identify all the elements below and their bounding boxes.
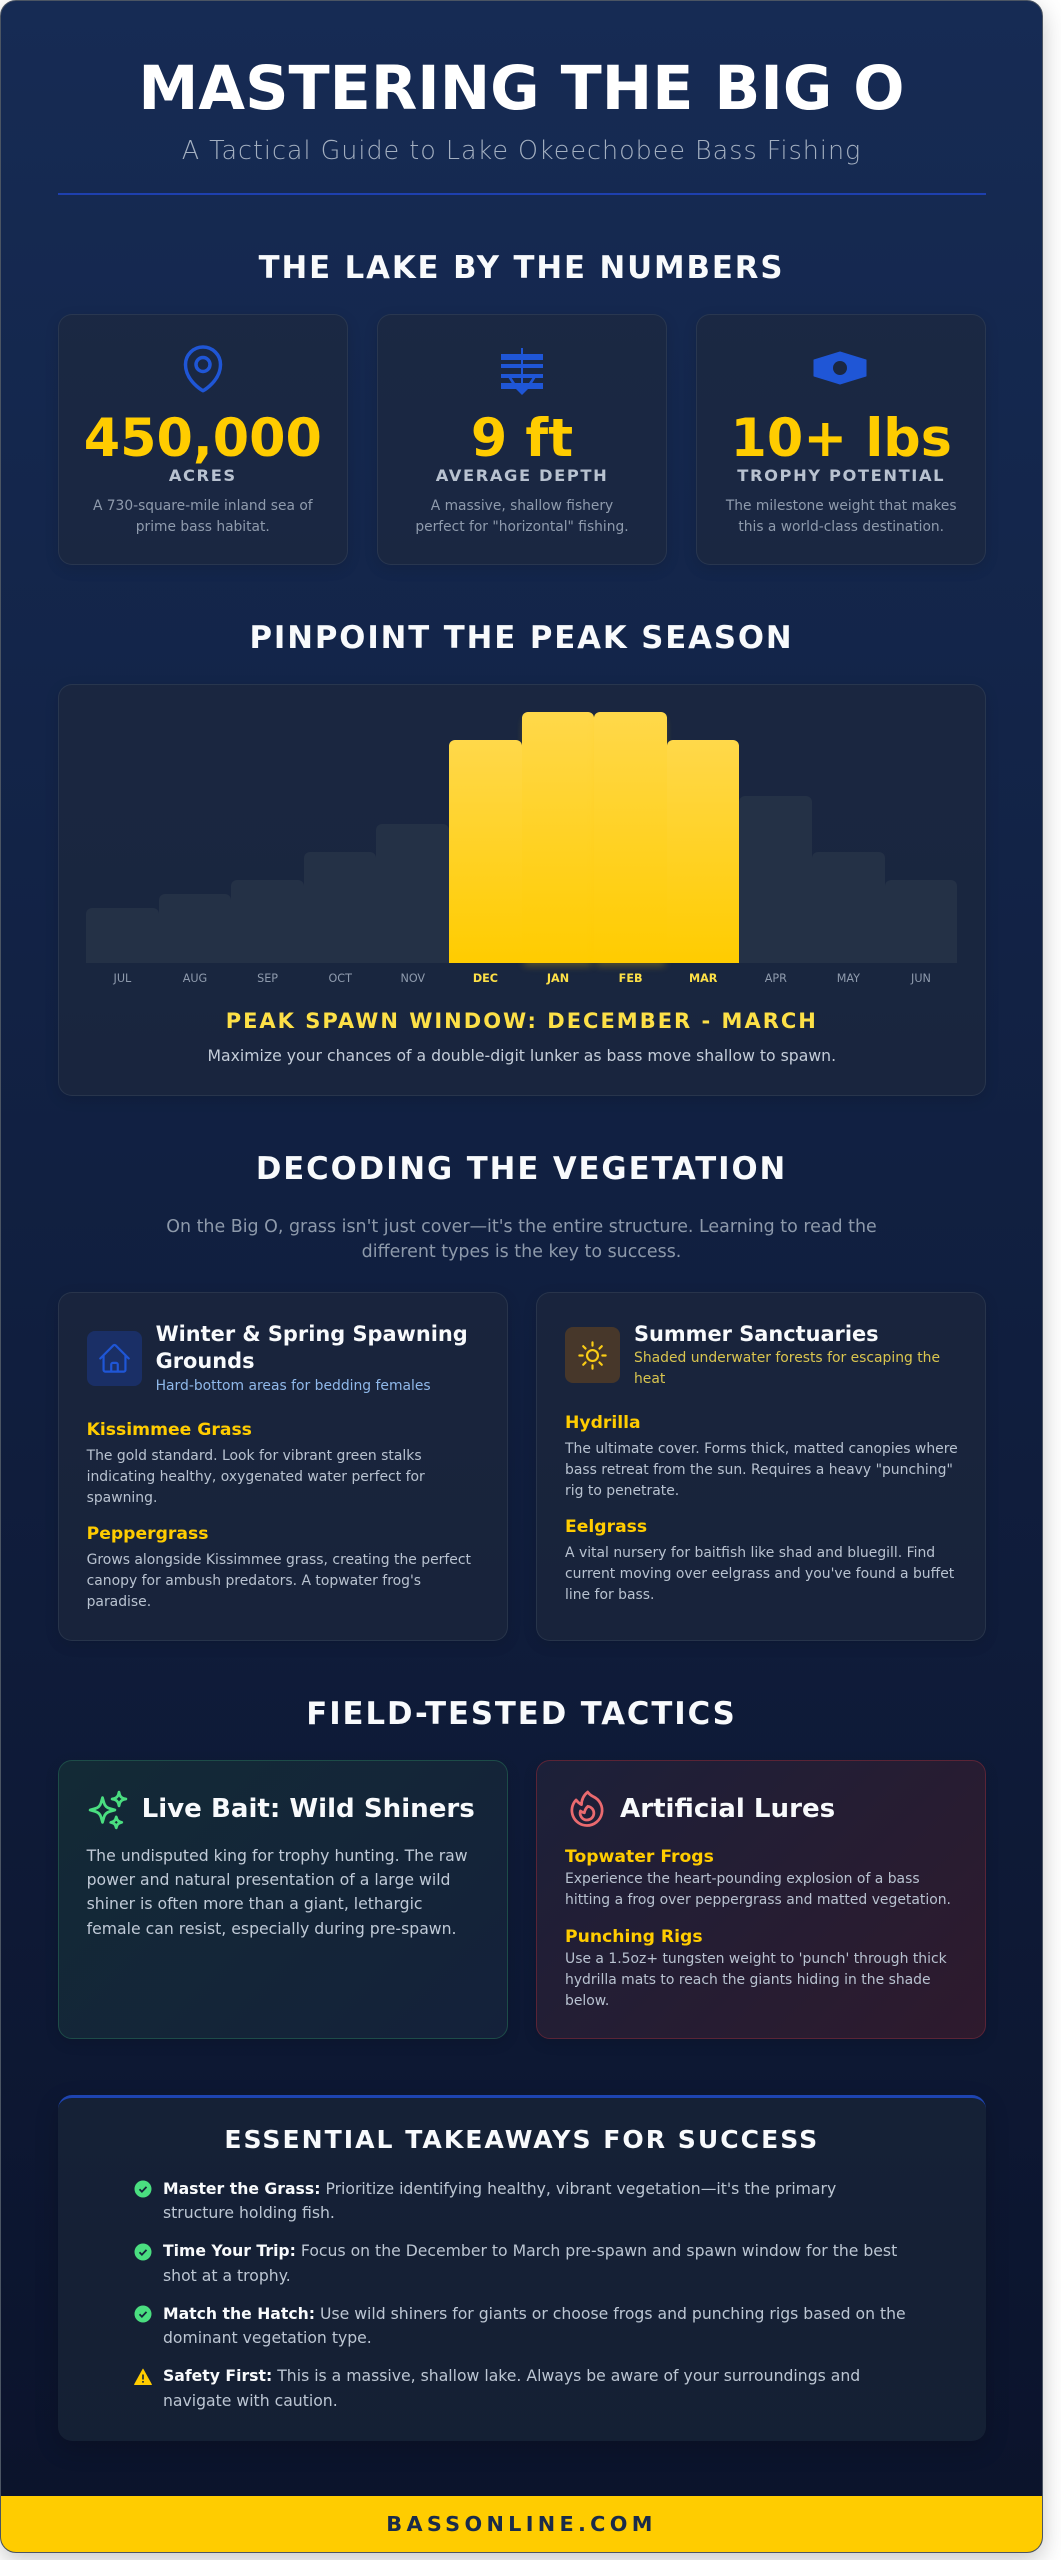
bar chart: DEC bbox=[473, 972, 498, 985]
bar chart: JAN bbox=[547, 972, 569, 985]
footer bar bbox=[0, 2496, 1043, 2553]
text: eelgrass: A vital nursery for baitfish like shad and bluegill. Find bbox=[565, 1544, 935, 1560]
stat description: this a world-class destination. bbox=[738, 519, 944, 535]
bar chart: FEB bbox=[619, 972, 642, 985]
heading: essential takeaways: ESSENTIAL TAKEAWAYS FOR SUCCESS bbox=[224, 2125, 819, 2154]
body text: female can resist, especially during pre-spawn. bbox=[87, 1919, 457, 1938]
text: peppergrass: canopy for ambush predators. A topwater frog's bbox=[87, 1572, 421, 1588]
stat description: A massive, shallow fishery bbox=[431, 498, 613, 514]
text: punching rigs: hydrilla mats to reach the giants hiding in the shade bbox=[565, 1972, 931, 1988]
body text bbox=[86, 1846, 468, 1938]
icon: warning bbox=[134, 2368, 152, 2385]
takeaway: safety first: navigate with caution. bbox=[163, 2391, 338, 2410]
text: hydrilla: The ultimate cover. Forms thick, matted canopies where bbox=[565, 1440, 958, 1456]
panel: trophy stat bbox=[696, 314, 986, 565]
text: hydrilla: bass retreat from the sun. Requires a heavy "punching" bbox=[565, 1462, 953, 1478]
card title: Winter & Spring Spawning bbox=[156, 1322, 468, 1346]
icon: hexagon eye bbox=[814, 352, 866, 384]
stat description: A 730-square-mile inland sea of bbox=[93, 498, 313, 514]
icon: check bbox=[134, 2244, 152, 2260]
stat label: TROPHY POTENTIAL bbox=[737, 466, 945, 485]
text: topwater frogs bbox=[565, 1870, 951, 1908]
intro text: On the Big O, grass isn't just cover—it's the entire structure. Learning to read the bbox=[166, 1217, 877, 1237]
intro text bbox=[166, 1217, 877, 1262]
takeaway: time your trip: Time Your Trip: Focus on the December to March pre-spawn and spawn window for the best bbox=[163, 2241, 897, 2260]
text: kissimmee grass: indicating healthy, oxygenated water perfect for bbox=[87, 1468, 425, 1484]
icon: map pin bbox=[184, 345, 222, 392]
bar chart: JUN bbox=[911, 972, 931, 985]
text: kissimmee grass bbox=[86, 1448, 425, 1506]
heading: pinpoint the peak season: PINPOINT THE PEAK SEASON bbox=[249, 620, 794, 656]
takeaway: match the hatch: Match the Hatch: Use wild shiners for giants or choose frogs and punching rigs based on the bbox=[163, 2304, 906, 2322]
panel: winter and spring grounds bbox=[58, 1292, 508, 1641]
takeaway: match the hatch bbox=[163, 2304, 906, 2347]
icon: home bbox=[87, 1330, 142, 1386]
body text: power and natural presentation of a large wild bbox=[87, 1870, 450, 1889]
heading: the lake by the numbers: THE LAKE BY THE NUMBERS bbox=[259, 250, 784, 286]
text: eelgrass: line for bass. bbox=[565, 1586, 654, 1602]
stat label: AVERAGE DEPTH bbox=[436, 466, 608, 485]
takeaway: master the grass: Master the Grass: Prioritize identifying healthy, vibrant vegetation—it's the primary bbox=[163, 2178, 836, 2198]
heading: field-tested tactics: FIELD-TESTED TACTICS bbox=[306, 1696, 737, 1732]
icon: sparkles bbox=[88, 1790, 128, 1830]
text: peppergrass bbox=[87, 1552, 471, 1610]
card title: Summer Sanctuaries bbox=[634, 1322, 879, 1346]
takeaway: safety first bbox=[163, 2366, 860, 2410]
icon: sun bbox=[565, 1326, 620, 1382]
icon: check bbox=[134, 2180, 152, 2198]
icon: fire bbox=[570, 1790, 604, 1827]
subheading: kissimmee grass: Kissimmee Grass bbox=[87, 1420, 252, 1440]
text: hydrilla bbox=[564, 1440, 958, 1498]
text: punching rigs bbox=[565, 1950, 947, 2008]
bar chart: OCT bbox=[328, 972, 352, 985]
body text: shiner is often more than a giant, lethargic bbox=[87, 1894, 423, 1913]
stat label: ACRES bbox=[169, 466, 237, 485]
body text: The undisputed king for trophy hunting. The raw bbox=[87, 1846, 468, 1864]
intro text: different types is the key to success. bbox=[362, 1242, 681, 1262]
callout description: Maximize your chances of a double-digit lunker as bass move shallow to spawn. bbox=[208, 1046, 836, 1064]
panel: artificial lures bbox=[536, 1760, 986, 2039]
card subtitle: Hard-bottom areas for bedding females bbox=[156, 1378, 431, 1394]
text: peppergrass: Grows alongside Kissimmee grass, creating the perfect bbox=[87, 1552, 471, 1568]
heading: decoding the vegetation: DECODING THE VEGETATION bbox=[256, 1151, 787, 1187]
panel: depth stat bbox=[377, 314, 667, 565]
stat number: 10+ lbs bbox=[731, 408, 952, 469]
text: kissimmee grass: The gold standard. Look for vibrant green stalks bbox=[87, 1448, 422, 1464]
stat number: 450,000 bbox=[84, 408, 322, 469]
panel: summer sanctuaries bbox=[536, 1292, 986, 1641]
card subtitle: Shaded underwater forests for escaping the bbox=[634, 1350, 940, 1366]
stat description bbox=[726, 498, 957, 535]
panel: essential takeaways bbox=[58, 2095, 986, 2441]
text: topwater frogs: hitting a frog over peppergrass and matted vegetation. bbox=[565, 1892, 951, 1908]
card title bbox=[156, 1322, 468, 1372]
takeaway: safety first: Safety First: This is a massive, shallow lake. Always be aware of your surroundings and bbox=[163, 2366, 860, 2385]
panel: peak season bbox=[58, 684, 986, 1096]
bar chart bbox=[86, 712, 957, 985]
title: MASTERING THE BIG O bbox=[138, 54, 905, 124]
bar chart: SEP bbox=[257, 972, 278, 985]
stat number: 9 ft bbox=[471, 408, 573, 469]
bar chart: APR bbox=[765, 972, 787, 985]
text: punching rigs: Use a 1.5oz+ tungsten weight to 'punch' through thick bbox=[565, 1950, 947, 1966]
takeaway: match the hatch: dominant vegetation type. bbox=[163, 2328, 372, 2347]
bar chart: JUL bbox=[114, 972, 131, 985]
text: eelgrass bbox=[565, 1544, 954, 1602]
takeaway: master the grass: structure holding fish. bbox=[163, 2203, 335, 2222]
subheading: peppergrass: Peppergrass bbox=[87, 1524, 208, 1544]
card subtitle bbox=[634, 1350, 940, 1386]
subtitle: A Tactical Guide to Lake Okeechobee Bass Fishing bbox=[182, 135, 861, 165]
subheading: topwater frogs: Topwater Frogs bbox=[565, 1846, 714, 1866]
panel: acres stat bbox=[58, 314, 348, 565]
stat description bbox=[93, 498, 313, 535]
takeaway: master the grass bbox=[163, 2178, 836, 2222]
text: topwater frogs: Experience the heart-pounding explosion of a bass bbox=[565, 1870, 920, 1886]
stat description: The milestone weight that makes bbox=[726, 498, 957, 514]
text: hydrilla: rig to penetrate. bbox=[565, 1482, 679, 1498]
card title: Live Bait: Wild Shiners bbox=[142, 1794, 475, 1824]
text: peppergrass: paradise. bbox=[87, 1594, 151, 1610]
subheading: punching rigs: Punching Rigs bbox=[565, 1926, 703, 1946]
panel: live bait bbox=[58, 1760, 508, 2039]
icon: depth gauge bbox=[501, 348, 543, 395]
text: kissimmee grass: spawning. bbox=[87, 1490, 157, 1506]
card title: Artificial Lures bbox=[620, 1794, 835, 1824]
text: punching rigs: below. bbox=[565, 1992, 609, 2008]
card title: Grounds bbox=[156, 1348, 255, 1372]
bar chart: NOV bbox=[400, 972, 425, 985]
callout: peak window: PEAK SPAWN WINDOW: DECEMBER - MARCH bbox=[226, 1009, 818, 1033]
stat description bbox=[415, 498, 629, 535]
bar chart: AUG bbox=[183, 972, 207, 985]
text: eelgrass: current moving over eelgrass and you've found a buffet bbox=[565, 1566, 954, 1582]
takeaway: time your trip bbox=[163, 2241, 897, 2285]
subheading: eelgrass: Eelgrass bbox=[565, 1516, 647, 1536]
subheading: hydrilla: Hydrilla bbox=[565, 1412, 641, 1432]
stat description: perfect for "horizontal" fishing. bbox=[415, 519, 629, 535]
footer text: BASSONLINE.COM bbox=[386, 2512, 657, 2536]
stat description: prime bass habitat. bbox=[136, 519, 270, 535]
icon: check bbox=[134, 2306, 152, 2322]
card subtitle: heat bbox=[634, 1370, 665, 1386]
bar chart: MAR bbox=[689, 972, 717, 985]
takeaway: time your trip: shot at a trophy. bbox=[163, 2266, 291, 2285]
bar chart: MAY bbox=[837, 972, 860, 985]
